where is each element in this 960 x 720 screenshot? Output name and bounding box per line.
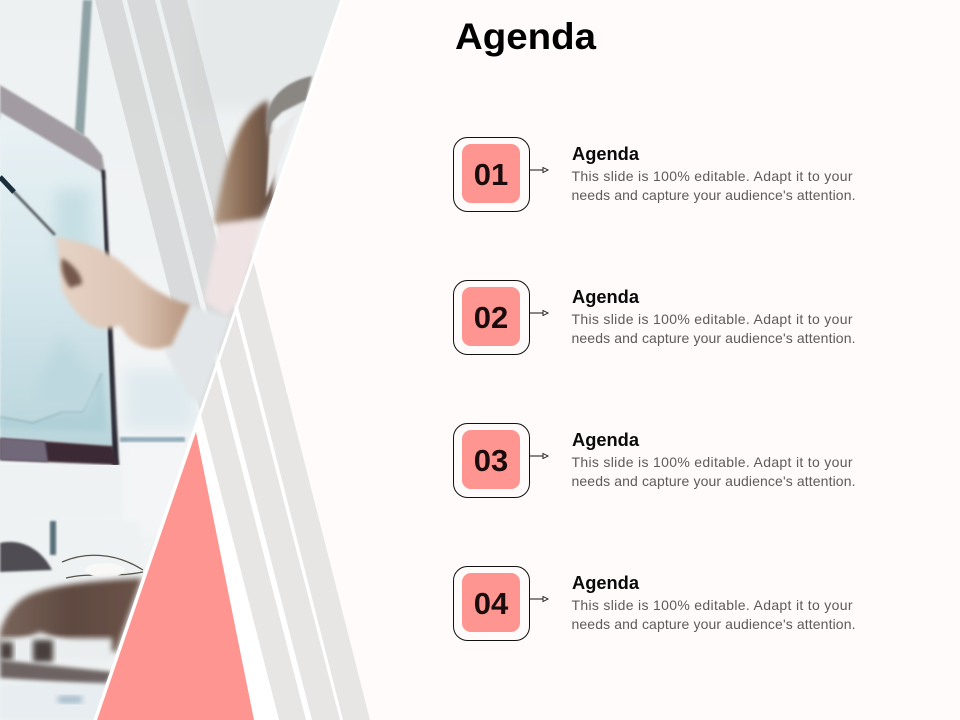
photo panel xyxy=(0,0,370,720)
arrow 04 xyxy=(530,596,548,602)
monitor screen xyxy=(0,112,112,446)
monitor stand pole xyxy=(75,0,92,136)
number badge 02: 02 xyxy=(474,300,508,335)
number badge 01: 01 xyxy=(474,157,508,192)
translucent stripes over photo xyxy=(95,0,252,410)
text 01: Agenda xyxy=(572,144,640,164)
background desk xyxy=(120,437,185,442)
monitor bottom bezel xyxy=(0,438,119,465)
mouse xyxy=(0,542,52,572)
arrow 03 xyxy=(530,454,548,458)
sleeve xyxy=(166,308,228,400)
agenda item 04 xyxy=(454,566,856,640)
agenda item 02 xyxy=(454,280,856,354)
chart on screen xyxy=(0,378,106,430)
pointing hand xyxy=(55,237,190,349)
arrow 02 xyxy=(530,310,548,316)
number badge 04 xyxy=(454,566,530,640)
agenda item 03 xyxy=(454,424,856,498)
arrow 01 xyxy=(530,168,548,172)
text 01: This slide is 100% editable. Adapt it to your xyxy=(572,168,853,184)
text 03: Agenda xyxy=(572,430,640,450)
typing hand xyxy=(0,578,142,652)
number badge 04: 04 xyxy=(474,586,509,621)
text 03 xyxy=(572,430,856,489)
text 03: This slide is 100% editable. Adapt it to your xyxy=(572,454,853,470)
monitor bezel xyxy=(0,85,106,180)
monitor right edge xyxy=(101,170,119,465)
text 01 xyxy=(572,144,856,203)
text 02: This slide is 100% editable. Adapt it to your xyxy=(572,311,853,327)
text 04: This slide is 100% editable. Adapt it to your xyxy=(572,597,853,613)
text 02 xyxy=(572,287,856,346)
agenda item 01 xyxy=(454,138,856,212)
woman shirt xyxy=(204,218,262,316)
pen xyxy=(12,190,55,235)
number badge 01 xyxy=(454,138,530,212)
pink triangle xyxy=(97,432,254,720)
monitor chin xyxy=(80,465,120,467)
text 04 xyxy=(572,573,856,632)
number badge 03: 03 xyxy=(474,443,508,478)
text 01: needs and capture your audience's attention. xyxy=(572,187,856,203)
white band behind stripes xyxy=(193,303,343,720)
text 02: Agenda xyxy=(572,287,640,307)
man face xyxy=(264,118,294,198)
woman hair xyxy=(214,100,274,224)
text 03: needs and capture your audience's attention. xyxy=(572,473,856,489)
keyboard xyxy=(0,638,112,660)
text 04: Agenda xyxy=(572,573,640,593)
post xyxy=(50,521,56,555)
man hair xyxy=(266,76,312,137)
title: Agenda xyxy=(455,16,596,57)
text 02: needs and capture your audience's attention. xyxy=(572,330,856,346)
text 04: needs and capture your audience's attention. xyxy=(572,616,856,632)
grey stripes xyxy=(201,262,370,720)
white diagonal divider xyxy=(95,0,342,720)
number badge 02 xyxy=(454,280,530,354)
number badge 03 xyxy=(454,424,530,498)
glasses xyxy=(62,555,143,578)
